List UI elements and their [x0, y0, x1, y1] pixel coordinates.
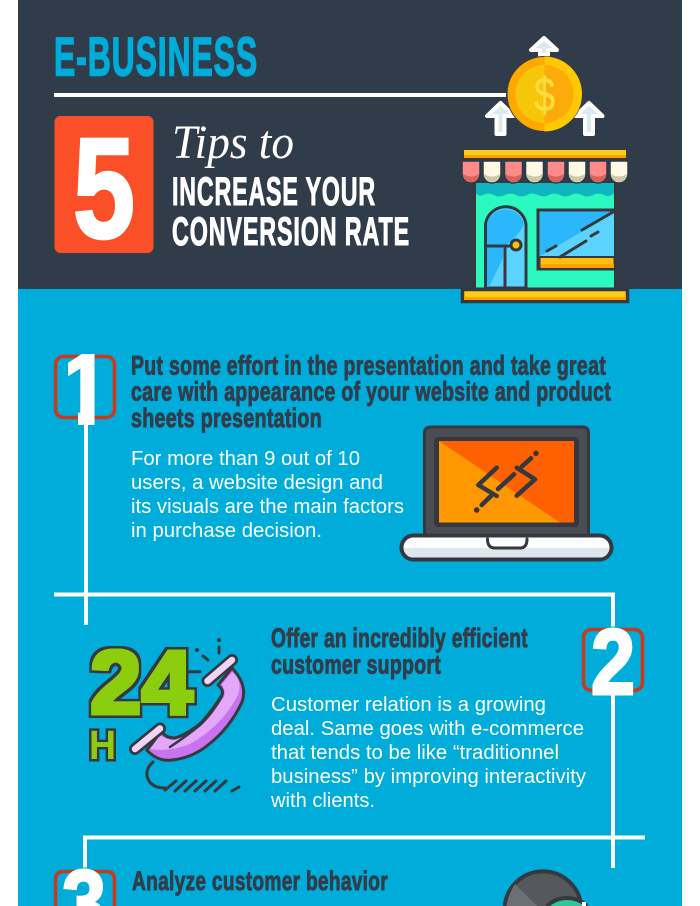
number badge 1: 1 — [58, 334, 114, 446]
number badge 2: 2 — [591, 610, 635, 714]
tip 1 body text: users, a website design and — [131, 471, 383, 494]
tip 2 body text: Customer relation is a growing — [271, 693, 546, 716]
tip 3 heading: Analyze customer behavior — [132, 866, 388, 896]
tip 2 body text: business” by improving interactivity — [271, 765, 587, 788]
panel: tip 3 — [56, 851, 587, 906]
tip 2 heading — [271, 623, 528, 680]
tip 2 heading: customer support — [271, 650, 441, 680]
tip 1 body text: in purchase decision. — [131, 519, 322, 542]
title script: Tips to: Tips to — [172, 116, 294, 169]
panel: tip 2 — [89, 610, 642, 812]
panel: tip 1 — [56, 334, 612, 560]
tip 1 heading: sheets presentation — [131, 403, 322, 433]
icon: coin with arrows — [487, 38, 602, 134]
title: Increase your conversion rate: CONVERSION RATE — [172, 210, 410, 254]
tip 2 body text: that tends to be like “traditionnel — [271, 741, 559, 764]
icon: 24H phone — [89, 634, 244, 791]
icon: partial user figure — [505, 871, 587, 906]
badge: number 5: 5 — [73, 110, 135, 268]
heading: E-Business: E-BUSINESS — [54, 26, 258, 88]
tip 1 heading — [131, 350, 611, 433]
number badge 1 — [54, 354, 116, 425]
panel: header — [18, 0, 682, 302]
icon: 24H phone: H — [89, 722, 116, 768]
tip 1 body text: its visuals are the main factors — [131, 495, 404, 518]
tip 2 body text: with clients. — [270, 789, 375, 812]
title: Increase your conversion rate — [172, 170, 410, 254]
tip 2 body text: deal. Same goes with e-commerce — [271, 717, 584, 740]
connector lines — [54, 420, 645, 868]
tip 1 body text: For more than 9 out of 10 — [131, 447, 360, 470]
tip 2 body text — [270, 693, 587, 812]
icon: shop — [462, 149, 628, 302]
icon: 24H phone: 24 — [90, 634, 193, 734]
tip 1 body text — [131, 447, 404, 542]
title: Increase your conversion rate: INCREASE YOUR — [172, 170, 376, 214]
tip 2 heading: Offer an incredibly efficient — [271, 623, 528, 653]
icon: laptop — [402, 427, 612, 560]
icon: coin with arrows: $ — [534, 69, 555, 122]
